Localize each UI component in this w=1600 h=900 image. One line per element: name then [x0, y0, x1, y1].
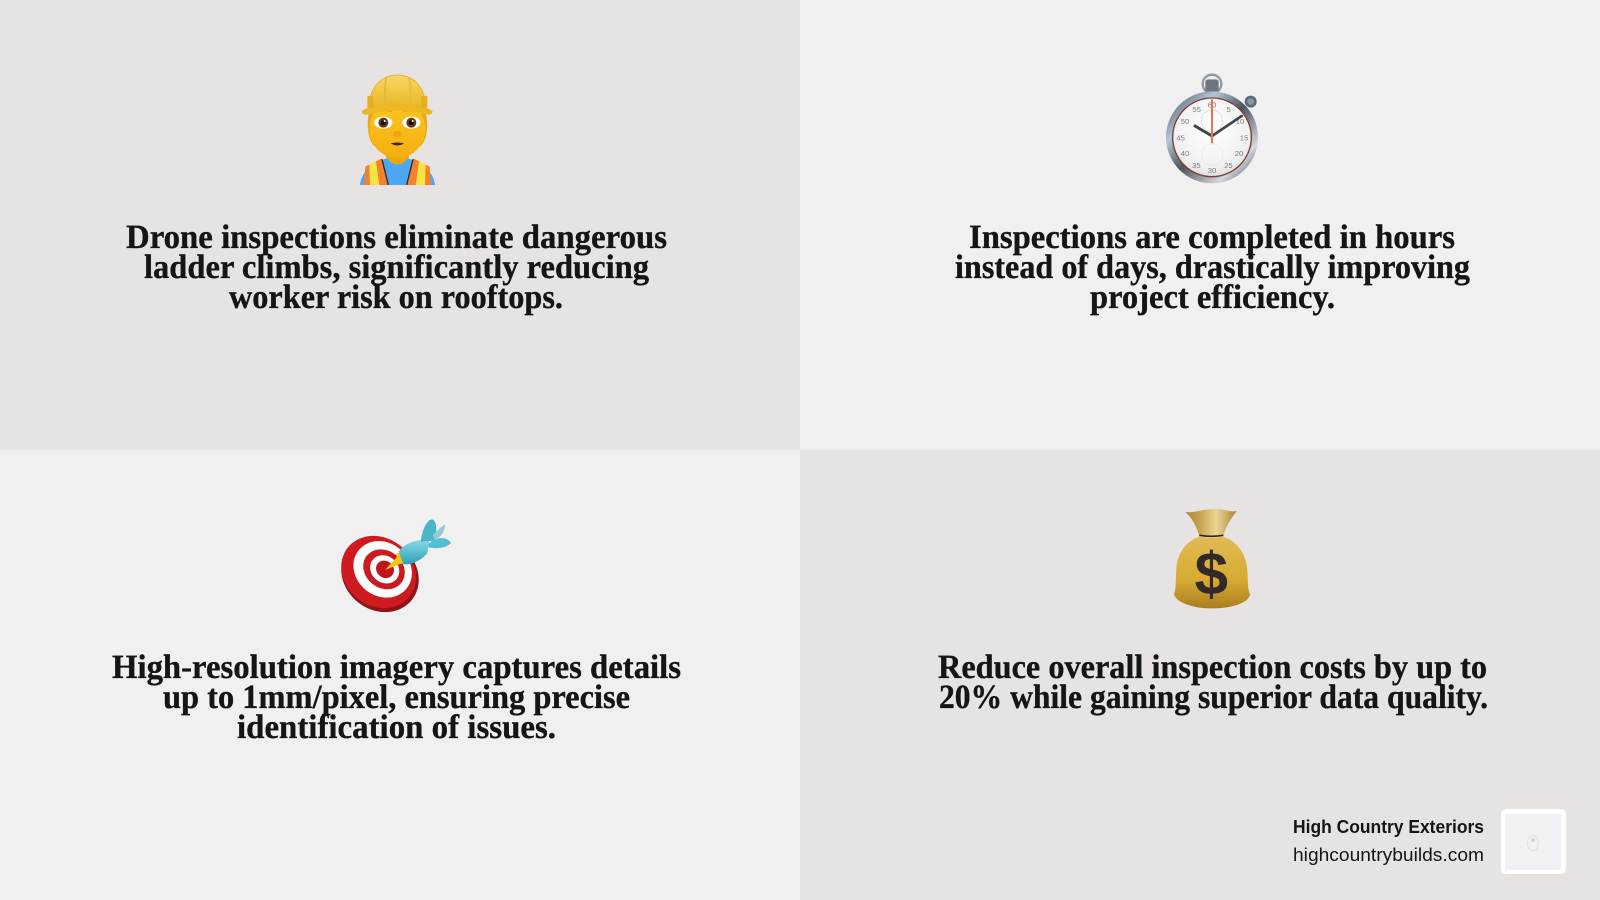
icon: money bag — [1174, 509, 1250, 608]
heading: worker safety: ladder climbs, significantly reducing — [144, 249, 649, 286]
heading: speed: project efficiency. — [1090, 279, 1335, 316]
icon: stopwatch: 40 — [1181, 149, 1189, 158]
icon: stopwatch: 10 — [1236, 117, 1244, 126]
icon: stopwatch: 30 — [1208, 166, 1216, 175]
footer: brand name and website — [1293, 817, 1484, 865]
heading: cost: 20% while gaining superior data quality. — [939, 679, 1488, 716]
icon: stopwatch: 5 — [1227, 105, 1231, 114]
footer: brand name and website: highcountrybuilds.com — [1293, 845, 1484, 865]
panel: cost — [800, 450, 1600, 900]
icon: money bag: $ — [1195, 541, 1228, 608]
heading: cost: Reduce overall inspection costs by up to — [938, 649, 1487, 686]
panel: precision — [0, 450, 800, 900]
icon: stopwatch: 60 — [1208, 100, 1216, 109]
icon: target with dart — [326, 519, 451, 628]
icon: stopwatch: 20 — [1235, 149, 1243, 158]
icon: stopwatch: 50 — [1181, 117, 1189, 126]
panel: speed — [800, 0, 1600, 450]
icon: stopwatch: 55 — [1192, 105, 1201, 114]
heading: speed: instead of days, drastically improving — [955, 249, 1470, 286]
panel: worker safety — [0, 0, 800, 450]
footer: brand name and website: High Country Exteriors — [1293, 817, 1484, 837]
logo box — [1501, 809, 1566, 874]
heading: speed: Inspections are completed in hours — [969, 219, 1455, 256]
icon: stopwatch: 15 — [1240, 133, 1248, 142]
heading: worker safety: worker risk on rooftops. — [229, 279, 563, 316]
icon: construction worker — [360, 75, 435, 185]
icon: stopwatch: 25 — [1224, 161, 1233, 170]
icon: stopwatch: 35 — [1192, 161, 1201, 170]
heading: worker safety — [126, 219, 667, 316]
heading: precision: High-resolution imagery captures details — [112, 649, 681, 686]
heading: precision: identification of issues. — [237, 709, 556, 746]
icon: stopwatch — [1166, 75, 1258, 183]
icon: stopwatch: 45 — [1176, 133, 1185, 142]
heading: precision — [112, 649, 681, 746]
heading: precision: up to 1mm/pixel, ensuring precise — [163, 679, 630, 716]
heading: worker safety: Drone inspections eliminate dangerous — [126, 219, 667, 256]
heading: speed — [955, 219, 1470, 316]
heading: cost — [938, 649, 1488, 716]
